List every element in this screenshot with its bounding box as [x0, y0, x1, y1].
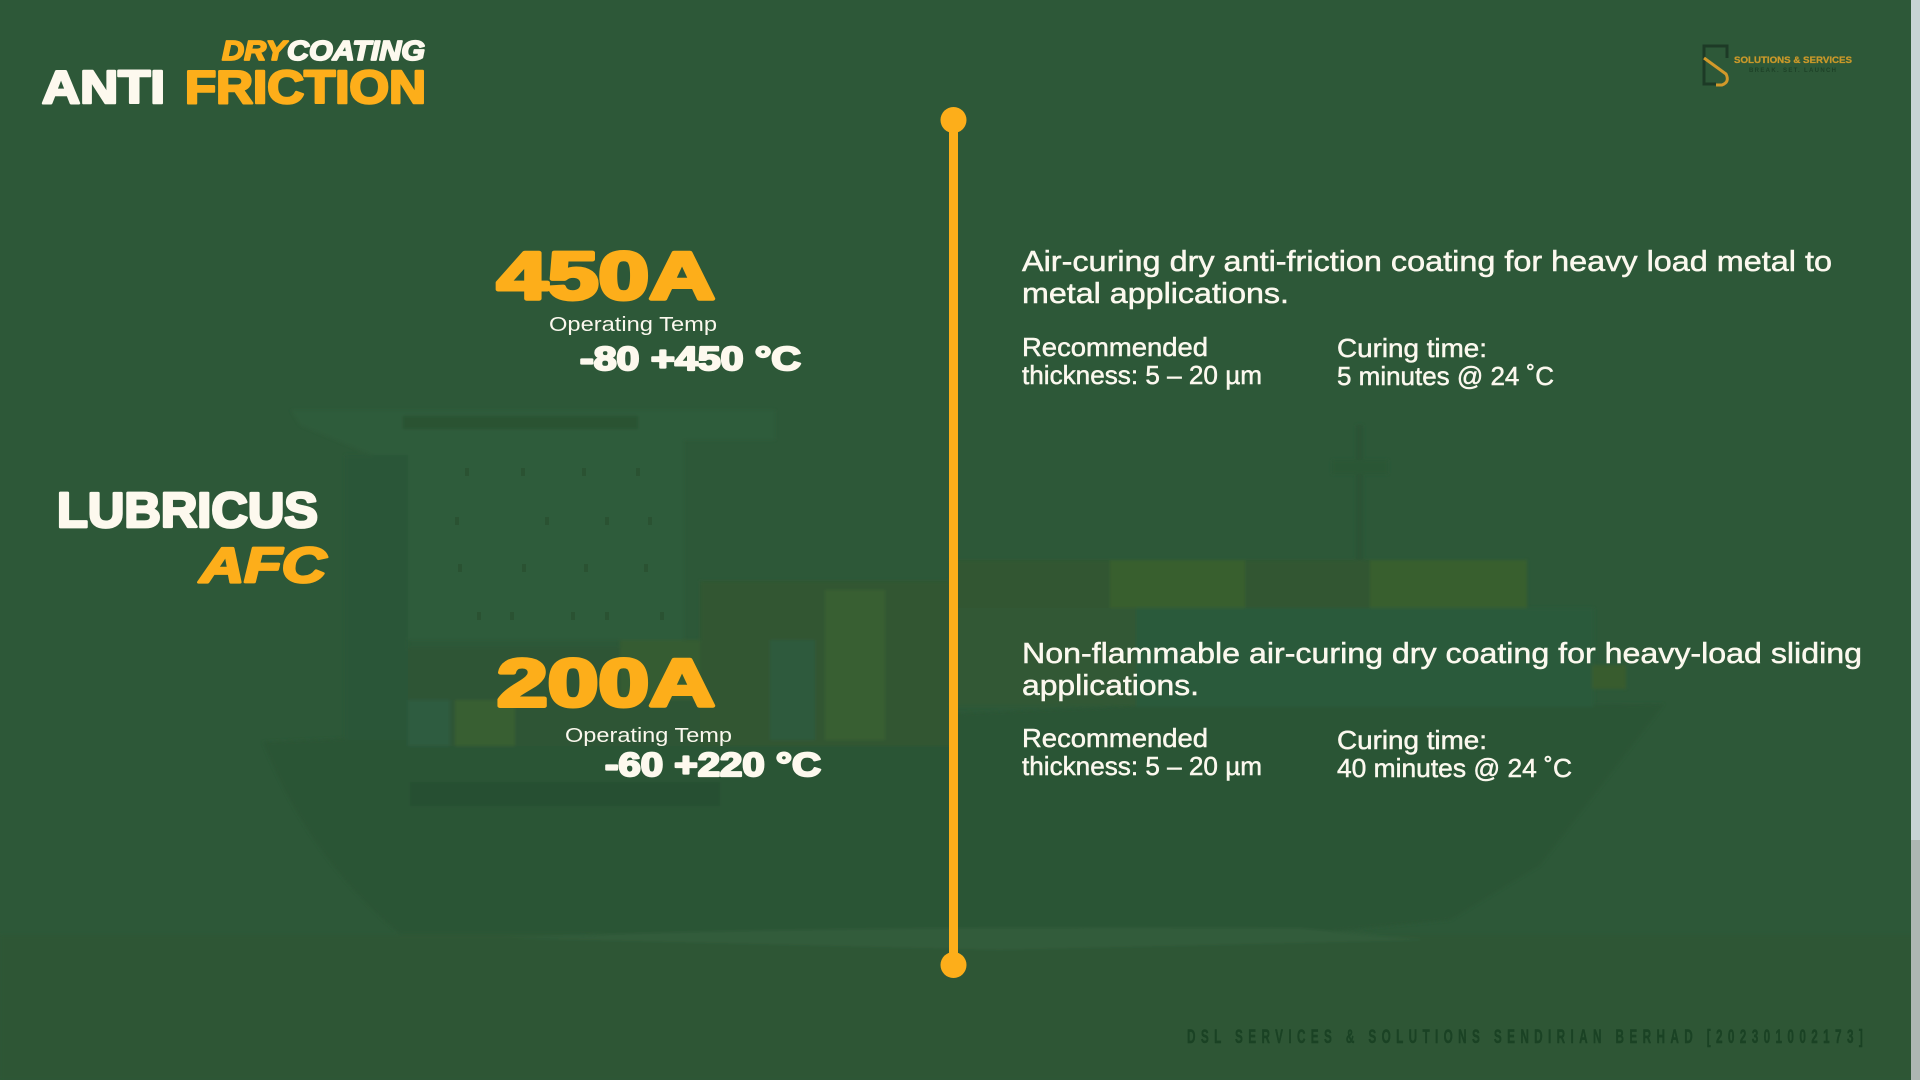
- title: COATING: [287, 35, 425, 66]
- grade 200A description: 40 minutes @ 24 ˚C: [1337, 753, 1572, 783]
- product name: [57, 484, 327, 593]
- logo: [1704, 46, 1852, 85]
- title: DRY: [222, 35, 289, 66]
- right edge strip: [1911, 0, 1920, 1080]
- grade 450A description: [1022, 246, 1832, 391]
- operating temp label: Operating Temp: [549, 314, 717, 336]
- grade 450A description: Air-curing dry anti-friction coating for heavy load metal to: [1022, 246, 1832, 278]
- product name: LUBRICUS: [57, 484, 318, 538]
- grade name: 450A: [497, 239, 715, 314]
- grade 450A specs: [497, 239, 801, 377]
- timeline divider: [940, 107, 966, 978]
- grade 450A description: Recommended: [1022, 332, 1208, 362]
- icon: logo mark: [1704, 46, 1727, 85]
- temp range: -60 +220 °C: [605, 746, 821, 783]
- title: [42, 35, 426, 113]
- grade 200A description: Curing time:: [1337, 725, 1487, 755]
- grade 200A description: [1022, 638, 1862, 783]
- grade 200A specs: [497, 646, 821, 783]
- grade 450A description: Curing time:: [1337, 333, 1487, 363]
- logo tagline: BREAK. SET. LAUNCH: [1749, 68, 1836, 74]
- grade 450A description: metal applications.: [1022, 278, 1289, 310]
- footer company name: DSL SERVICES & SOLUTIONS SENDIRIAN BERHAD [202301002173]: [1187, 1027, 1863, 1048]
- logo wordmark: SOLUTIONS & SERVICES: [1734, 55, 1852, 66]
- product name: AFC: [199, 539, 327, 593]
- grade 200A description: Recommended: [1022, 723, 1208, 753]
- grade 200A description: thickness: 5 – 20 µm: [1022, 751, 1262, 781]
- grade 450A description: thickness: 5 – 20 µm: [1022, 360, 1262, 390]
- operating temp label: Operating Temp: [565, 725, 732, 747]
- title: ANTI: [42, 61, 165, 113]
- grade name: 200A: [497, 646, 715, 721]
- grade 450A description: 5 minutes @ 24 ˚C: [1337, 361, 1554, 391]
- title: FRICTION: [185, 61, 426, 113]
- grade 200A description: applications.: [1022, 670, 1199, 702]
- temp range: -80 +450 °C: [580, 340, 801, 377]
- grade 200A description: Non-flammable air-curing dry coating for heavy-load sliding: [1022, 638, 1862, 670]
